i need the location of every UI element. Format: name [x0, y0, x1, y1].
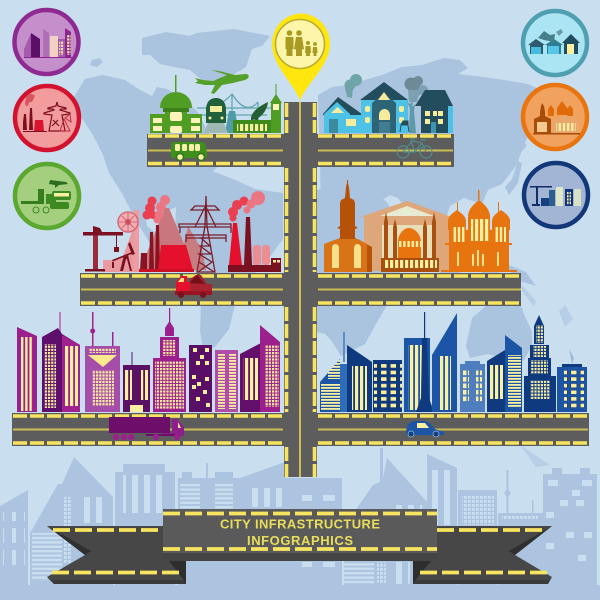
tower four	[123, 352, 150, 412]
category circle: houses	[523, 11, 587, 75]
title ribbon	[47, 509, 552, 584]
landmarks district	[324, 180, 517, 272]
clock tower	[270, 84, 282, 133]
title text	[220, 516, 380, 548]
tower one	[17, 327, 37, 412]
title text: CITY INFRASTRUCTURE	[220, 516, 380, 532]
tower one	[320, 332, 348, 412]
category circle: industry	[15, 86, 79, 150]
category circle: landmarks	[523, 85, 587, 149]
icon: family	[286, 30, 318, 56]
mine tower	[103, 210, 139, 272]
electricity pylon	[179, 196, 231, 272]
house one	[323, 97, 362, 133]
tower two	[42, 312, 80, 412]
light blue block	[460, 361, 485, 412]
ribbon centre panel	[163, 509, 437, 561]
bus	[171, 142, 207, 160]
purple skyline district	[17, 308, 280, 440]
smoke	[344, 74, 362, 98]
tower three	[373, 360, 402, 412]
tower five	[153, 308, 186, 412]
bicycle	[397, 139, 432, 158]
industrial district	[83, 191, 281, 298]
right ribbon tail	[413, 526, 552, 584]
road network	[12, 102, 589, 477]
house three	[415, 90, 453, 133]
train	[204, 98, 228, 133]
tower two	[347, 345, 372, 412]
dump truck	[175, 275, 212, 298]
railway bridge	[197, 94, 271, 133]
tree	[407, 101, 416, 133]
tower three	[85, 312, 120, 412]
location pin	[272, 14, 330, 101]
category circle: transport	[15, 164, 79, 228]
category circle: city buildings	[14, 10, 78, 74]
lorry	[109, 417, 184, 440]
pale hills	[140, 208, 195, 270]
tv tower and block	[404, 312, 434, 412]
mosque	[381, 212, 439, 272]
house two	[360, 82, 408, 133]
theatre	[360, 201, 452, 271]
title text: INFOGRAPHICS	[247, 533, 353, 548]
slanted tower	[432, 313, 457, 412]
cooling towers	[139, 225, 194, 272]
baby stroller	[400, 121, 409, 132]
tower eight	[240, 325, 280, 412]
tower seven	[215, 350, 238, 412]
world map	[71, 29, 574, 467]
background skyline	[0, 448, 600, 600]
blue skyline district	[320, 312, 587, 437]
car	[406, 421, 444, 437]
tower six	[189, 345, 212, 412]
left ribbon tail	[47, 526, 186, 584]
category circle: construction	[524, 163, 588, 227]
satellite dish and low building	[233, 102, 273, 133]
residential district	[323, 74, 453, 158]
corner tower	[557, 349, 587, 412]
oil pump	[112, 242, 135, 271]
red smoke	[142, 196, 157, 220]
green transport district	[150, 70, 282, 160]
church	[324, 180, 372, 272]
factory	[228, 191, 281, 272]
wedge tower	[487, 335, 522, 412]
cathedral	[441, 190, 517, 272]
station building	[150, 75, 202, 133]
construction crane	[83, 226, 123, 272]
airplane	[195, 70, 249, 94]
stepped tower	[524, 315, 556, 412]
